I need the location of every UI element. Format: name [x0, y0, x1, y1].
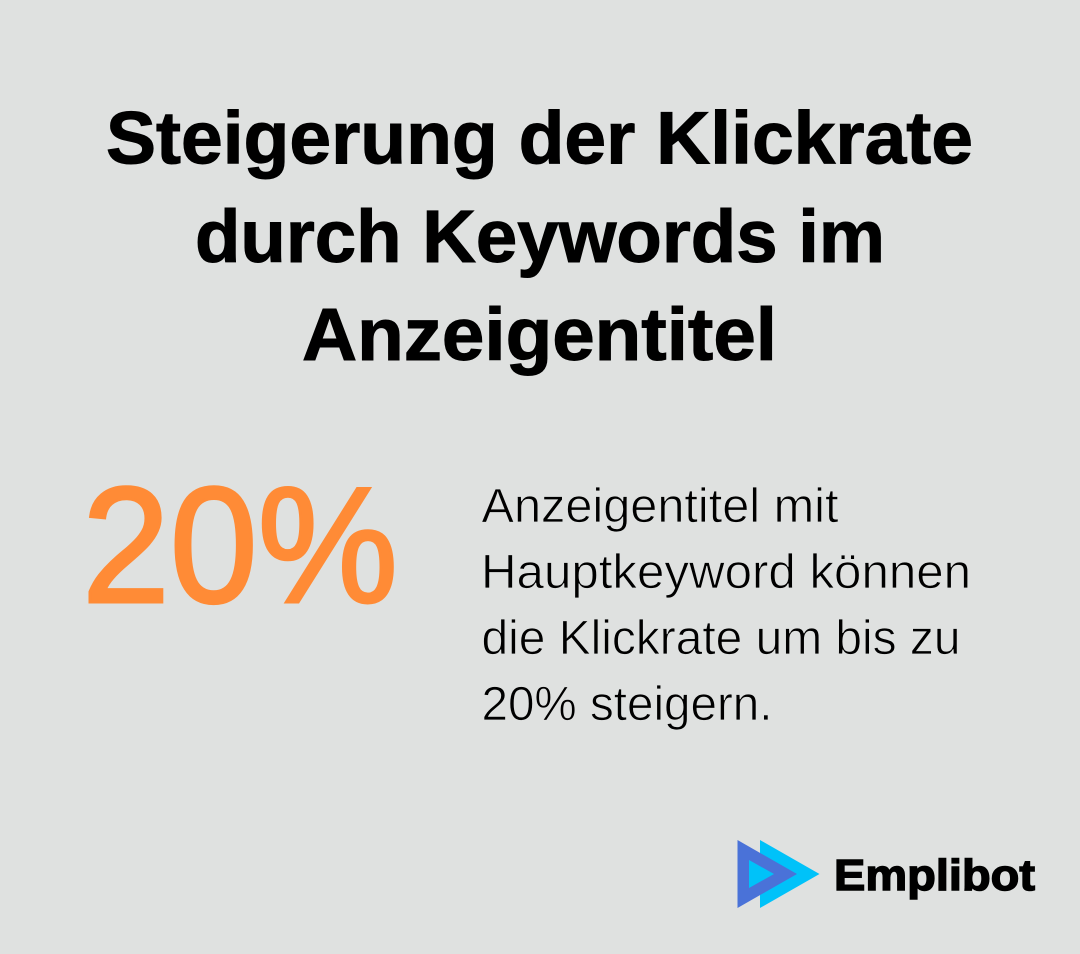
- description text: die Klickrate um bis zu: [482, 612, 960, 665]
- title: Steigerung der Klickrate: [106, 96, 973, 180]
- description text: 20% steigern.: [482, 678, 772, 731]
- icon: play triangles: [738, 840, 820, 908]
- description text: Hauptkeyword können: [481, 546, 971, 599]
- title: [106, 96, 973, 376]
- title: Anzeigentitel: [302, 293, 777, 376]
- description text: [481, 480, 971, 731]
- title: durch Keywords im: [195, 195, 885, 278]
- logo wordmark: Emplibot: [834, 851, 1035, 900]
- big number: 20%: 20%: [82, 453, 398, 637]
- logo: Emplibot: [738, 840, 1035, 908]
- description text: Anzeigentitel mit: [482, 480, 838, 533]
